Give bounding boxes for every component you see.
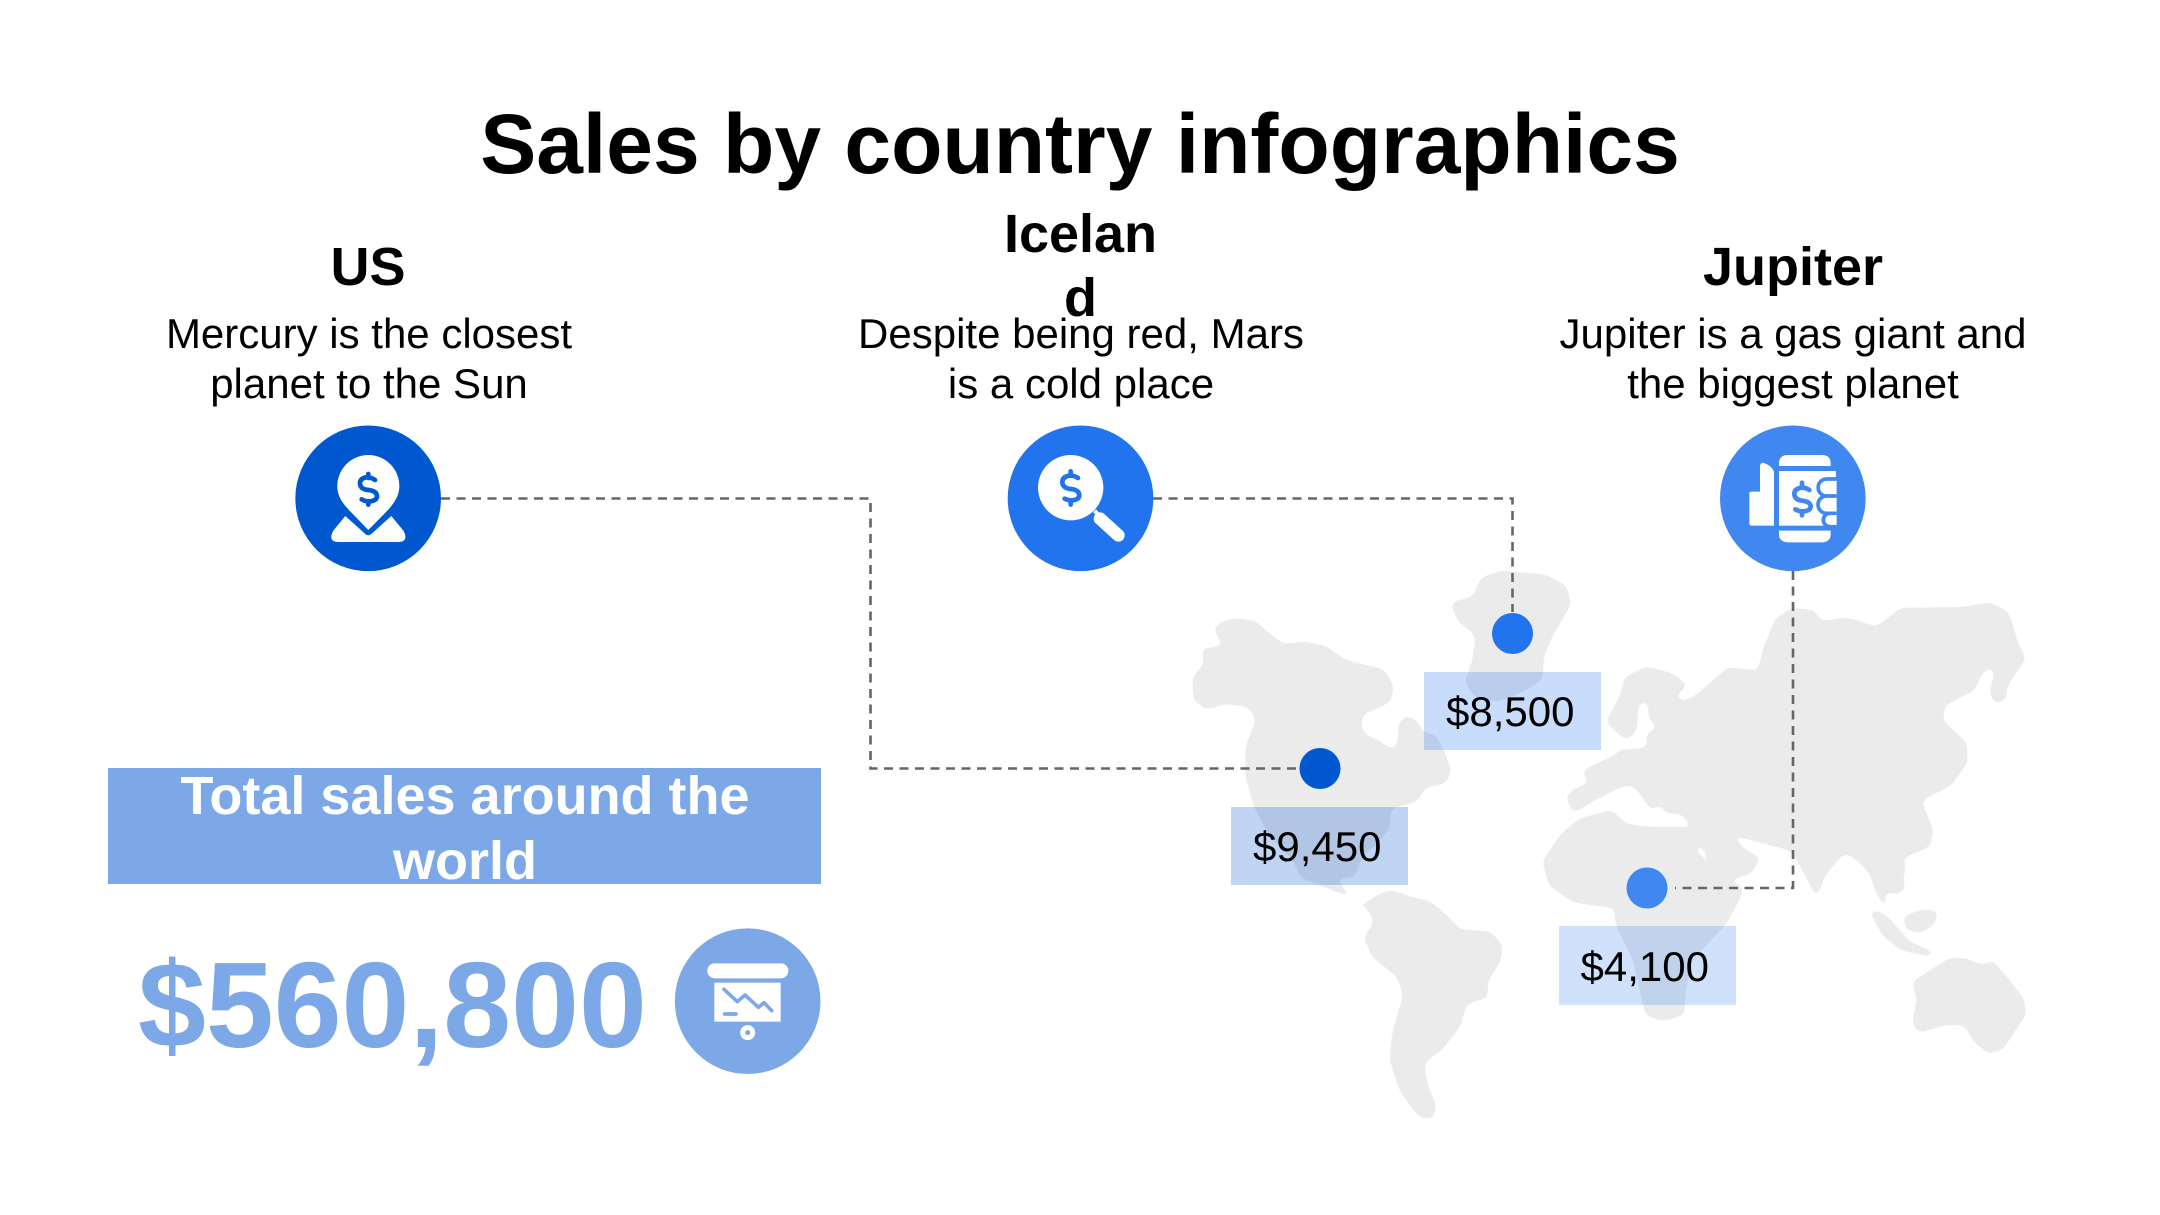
banner: total sales: world [392, 831, 537, 891]
text: US description: Mercury is the closest [166, 310, 572, 357]
column: Iceland [858, 204, 1304, 407]
text: Iceland description: is a cold place [948, 360, 1214, 407]
text: Iceland description: Despite being red, Mars [858, 310, 1304, 357]
total amount: $560,800 [138, 937, 647, 1073]
column: Jupiter [1560, 237, 2026, 407]
marker: Jupiter: $4,100 [1580, 943, 1709, 990]
heading: US: US [330, 237, 406, 297]
heading: Iceland: Icelan [1004, 204, 1157, 264]
world map [1194, 572, 2024, 1118]
marker: US [1231, 748, 1408, 885]
heading: Iceland: d [1064, 268, 1097, 328]
connector: Iceland to map [1153, 498, 1512, 612]
icon: phone with dollar and thumbs up [1720, 425, 1866, 571]
connector: US to map [441, 498, 1300, 768]
text: Jupiter description: the biggest planet [1627, 360, 1959, 407]
icon: map pin with dollar [295, 425, 441, 571]
icon: presentation chart [675, 928, 820, 1074]
banner: total sales: Total sales around the [180, 766, 750, 826]
text: Jupiter description: Jupiter is a gas giant and [1560, 310, 2026, 357]
title: Sales by country infographics [480, 97, 1680, 191]
connector: Jupiter to map [1675, 571, 1793, 888]
text: US description: planet to the Sun [210, 360, 528, 407]
column: US [166, 237, 572, 407]
banner: total sales [108, 766, 821, 891]
marker: Iceland: $8,500 [1446, 688, 1574, 735]
marker: Jupiter [1559, 868, 1736, 1005]
icon: magnifier with dollar [1008, 425, 1153, 571]
marker: Iceland [1424, 613, 1601, 750]
marker: US: $9,450 [1253, 823, 1381, 870]
heading: Jupiter: Jupiter [1703, 237, 1883, 297]
